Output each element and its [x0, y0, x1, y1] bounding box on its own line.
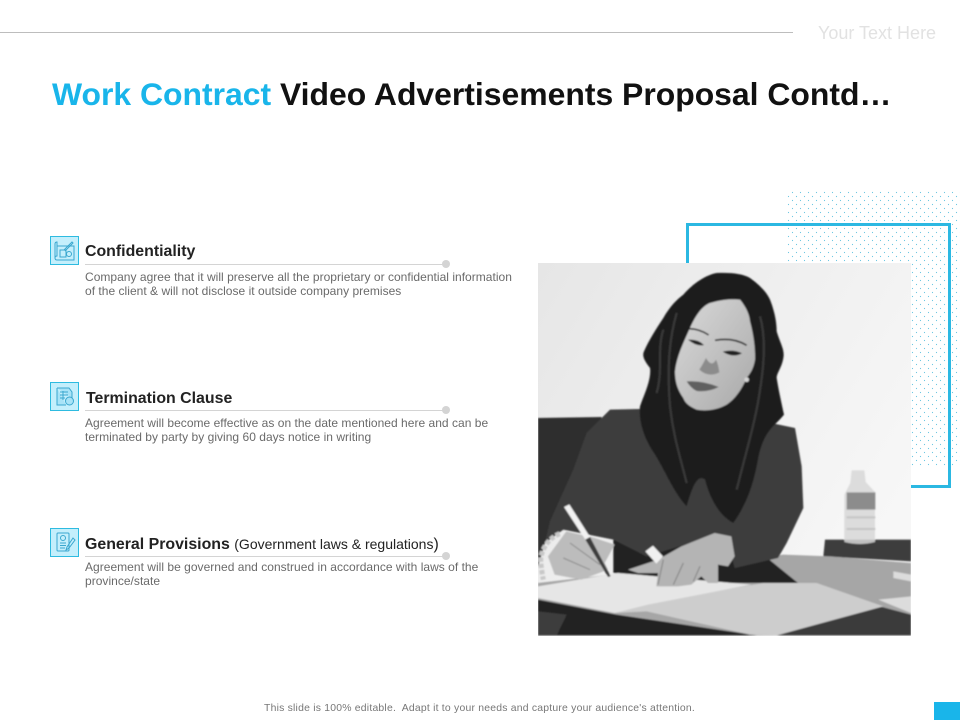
dotted pattern panel	[788, 192, 957, 466]
heading: General Provisions (Government laws & regulations)	[85, 536, 439, 553]
dress shadow behind hands	[613, 533, 798, 583]
eyes	[688, 340, 704, 345]
photo: woman signing a document	[538, 263, 911, 636]
description: province/state	[85, 574, 160, 588]
panel: confidentiality	[50, 236, 512, 298]
description: terminated by party by giving 60 days notice in writing	[85, 430, 371, 444]
side table	[823, 540, 911, 561]
icon: certificate and pen	[50, 528, 79, 557]
hair highlights	[657, 313, 764, 490]
face	[675, 299, 755, 410]
footer note: This slide is 100% editable. Adapt it to your needs and capture your audience's attention.	[264, 703, 695, 714]
hair	[640, 273, 784, 523]
marker	[645, 546, 663, 564]
icon: document with badge	[50, 382, 79, 411]
torso and sleeves	[545, 409, 803, 568]
page number tab	[934, 702, 960, 720]
description: Company agree that it will preserve all the proprietary or confidential information	[85, 270, 512, 284]
neck and chest	[682, 396, 763, 458]
lips	[687, 381, 719, 391]
nose shadow	[699, 358, 719, 375]
description	[85, 270, 512, 298]
chair	[538, 417, 602, 566]
dark desk front	[538, 600, 757, 635]
brows	[689, 329, 709, 335]
earring	[744, 377, 749, 382]
header placeholder text: Your Text Here	[818, 23, 936, 43]
icon: blueprint	[50, 236, 79, 265]
pen	[564, 504, 590, 540]
water bottle	[844, 470, 875, 544]
divider with end dot	[85, 406, 450, 414]
description	[85, 560, 478, 588]
blue outline frame	[686, 223, 951, 488]
description: Agreement will be governed and construed in accordance with laws of the	[85, 560, 478, 574]
title: Work Contract Video Advertisements Proposal Contd…	[52, 76, 891, 112]
description: Agreement will become effective as on the date mentioned here and can be	[85, 416, 488, 430]
divider with end dot	[85, 552, 450, 560]
wall	[538, 263, 911, 636]
bracelet	[541, 534, 560, 580]
table top	[538, 555, 911, 635]
divider with end dot	[85, 260, 450, 268]
papers	[615, 583, 883, 635]
top header rule	[0, 32, 793, 33]
writing hand	[548, 531, 615, 580]
heading: Termination Clause	[86, 390, 232, 407]
description	[85, 416, 488, 444]
panel: termination clause	[50, 382, 488, 444]
heading: Confidentiality	[85, 243, 195, 260]
resting hand	[628, 533, 735, 586]
description: of the client & will not disclose it outside company premises	[85, 284, 401, 298]
panel: general provisions	[50, 528, 478, 588]
